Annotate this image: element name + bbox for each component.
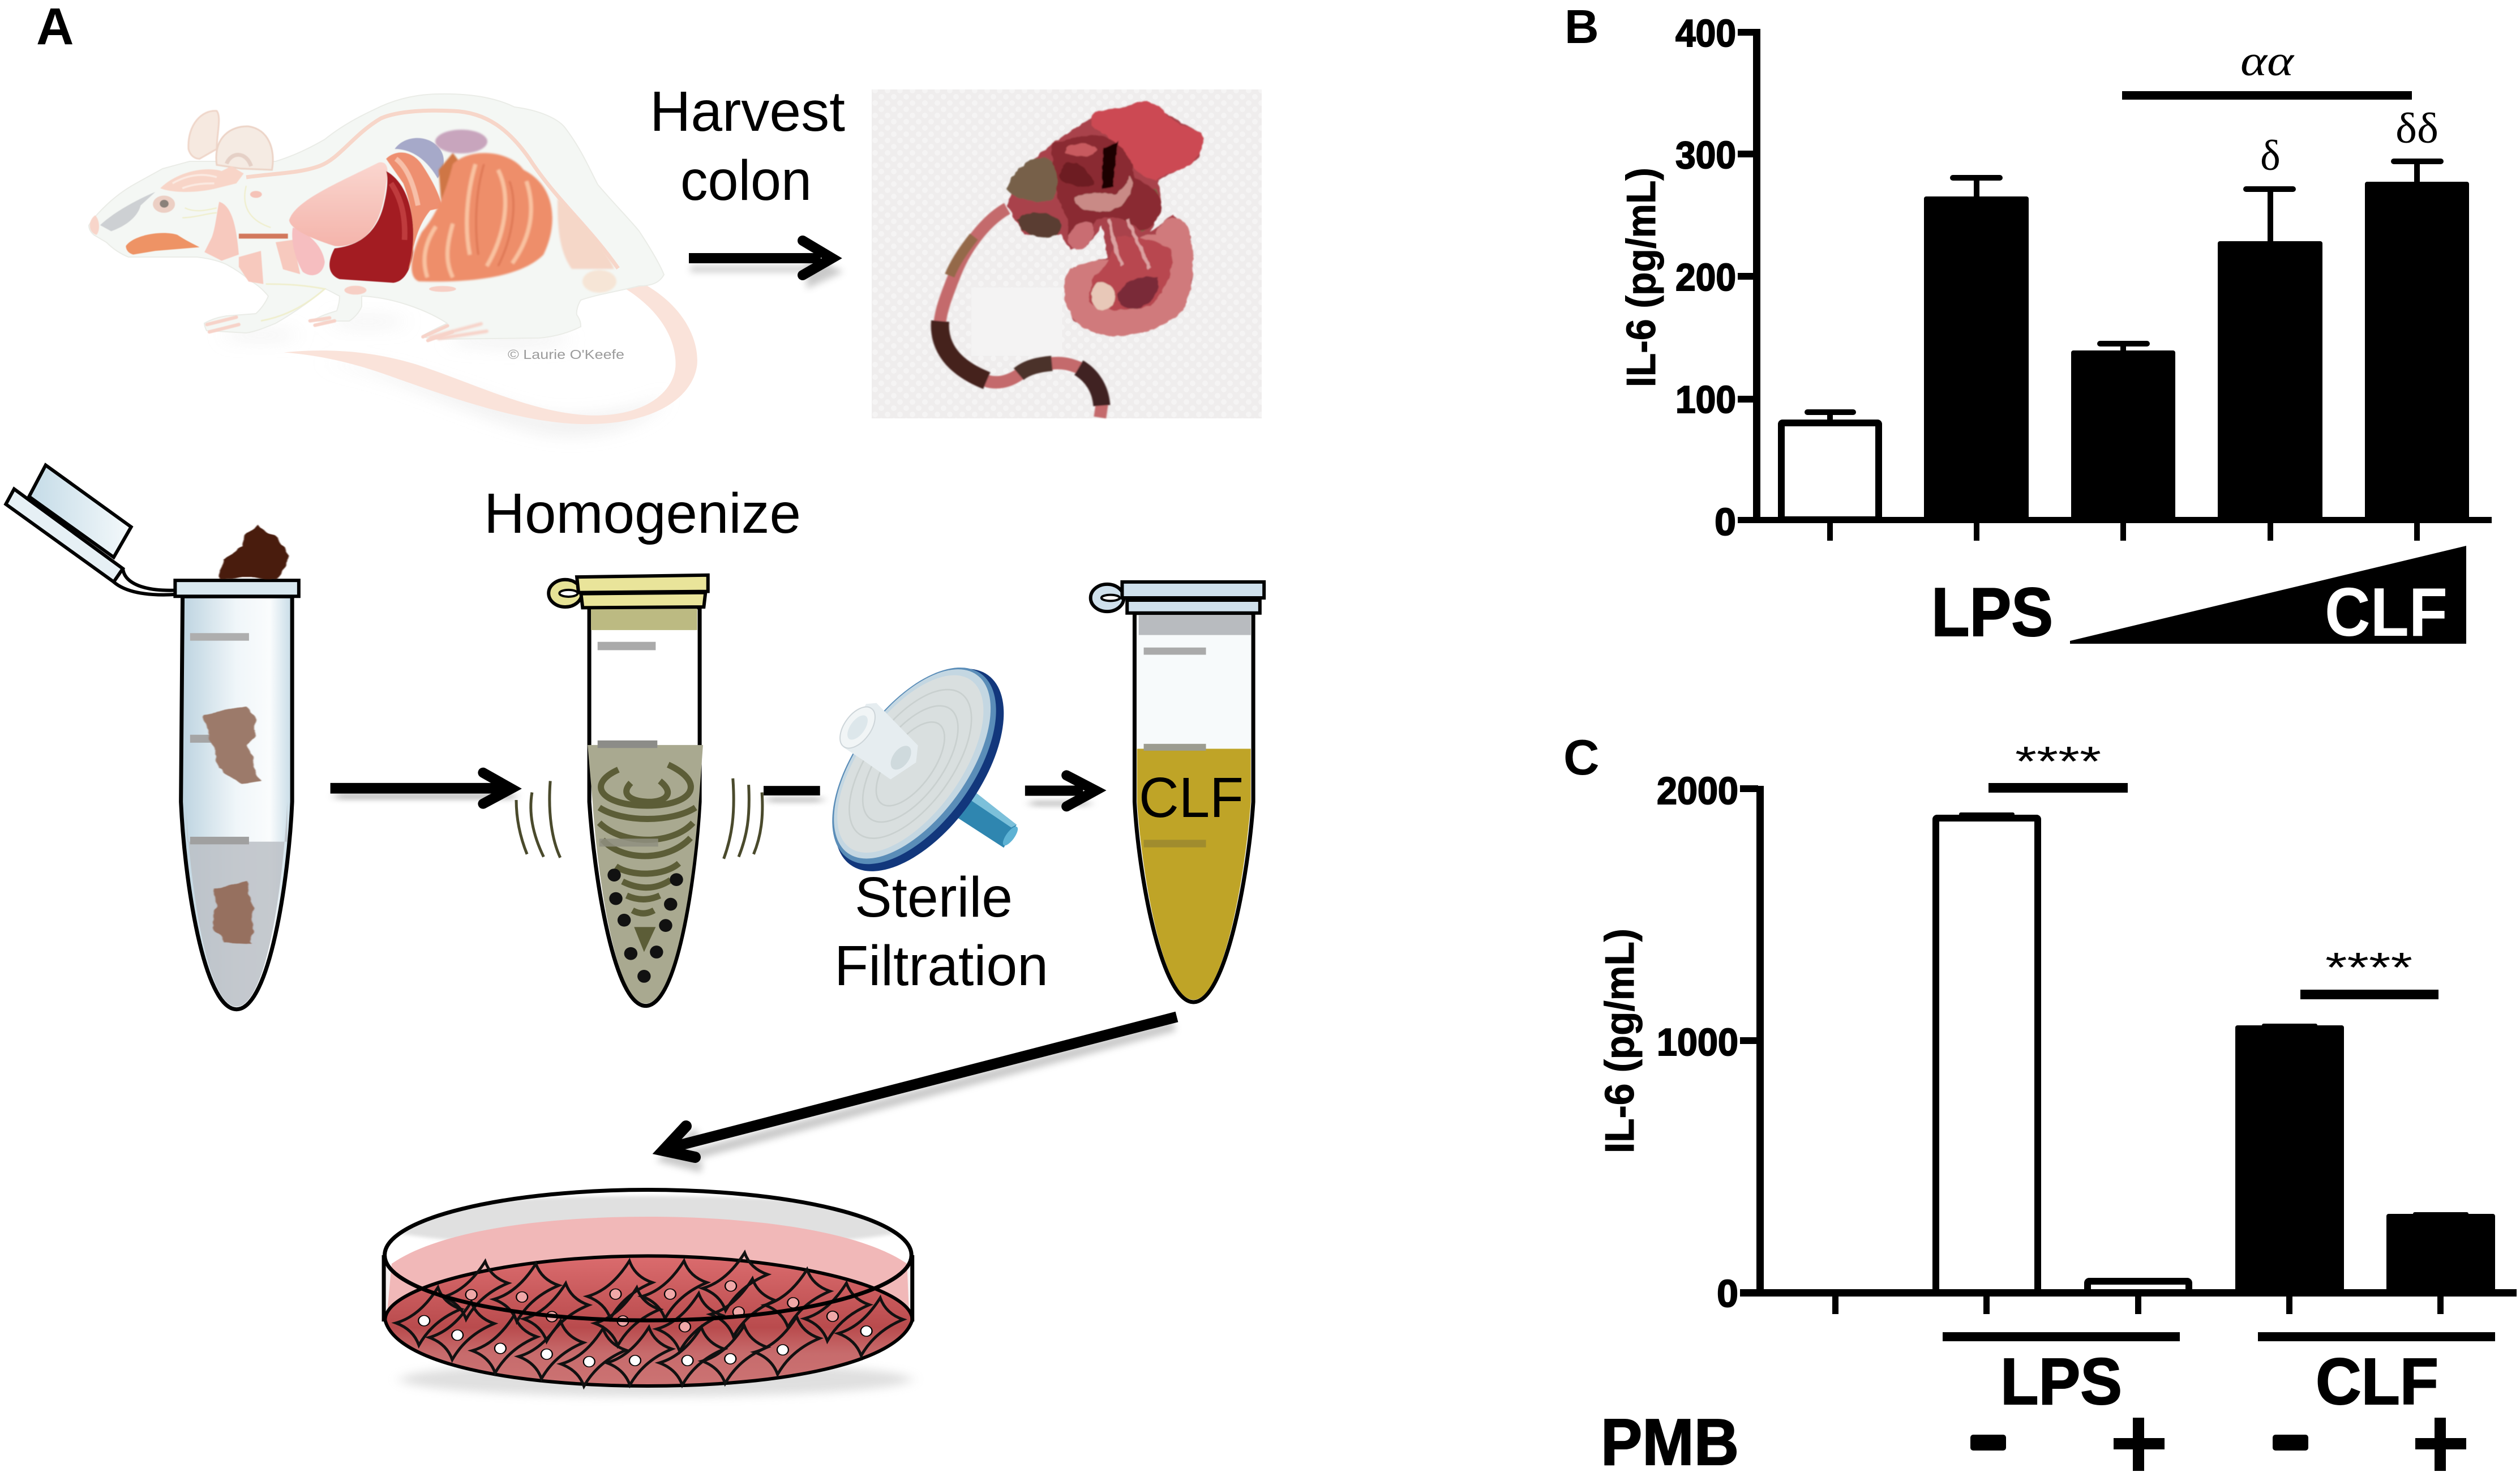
bar: low CLF: [2071, 341, 2175, 520]
vibration lines: [516, 778, 762, 859]
y axis tick labels: 0: [1715, 500, 1736, 544]
y axis tick labels: 400: [1675, 12, 1736, 55]
label: LPS: LPS: [1931, 574, 2053, 651]
illustration: rat anatomy: [89, 94, 697, 433]
significance: CLF comparison: [2300, 944, 2438, 999]
y axis title: IL-6 (pg/mL): [1597, 929, 1643, 1153]
significance: CLF comparison: ****: [2325, 944, 2412, 991]
tube: filtered CLF: [1091, 582, 1264, 1002]
label: Sterile: Sterile: [855, 866, 1013, 929]
PMB minus LPS: [1970, 1435, 2006, 1451]
tissue pieces: [206, 526, 290, 944]
panel: A, colon-derived fluid preparation workflow: [6, 0, 1264, 1397]
delta marks on high CLF: δδ: [2395, 105, 2438, 152]
arrow: homogenizer to filter (dash): [764, 786, 822, 803]
label: colon: colon: [680, 149, 812, 212]
significance bar with alpha marks: αα: [2240, 37, 2295, 85]
label: Homogenize: Homogenize: [484, 482, 801, 545]
wedge: increasing CLF: CLF: [2325, 574, 2448, 651]
tube: homogenizing sample: [548, 575, 708, 1006]
wedge: increasing CLF: [2070, 546, 2466, 651]
label: Harvest: Harvest: [650, 80, 845, 143]
rear organs: [412, 130, 616, 339]
row: PMB treatment: [1601, 1405, 2466, 1476]
PMB minus CLF: [2273, 1435, 2308, 1451]
tube: open tube with colon tissue: [6, 465, 299, 1009]
bar: control: [1781, 409, 1879, 520]
bar: CLF without PMB: [2235, 1024, 2344, 1293]
PMB plus CLF: [2415, 1418, 2466, 1471]
spine: [246, 110, 618, 268]
significance: LPS comparison: [1988, 738, 2128, 793]
bar: LPS without PMB: [1936, 812, 2038, 1293]
delta mark on mid CLF: δ: [2260, 132, 2281, 179]
axes and ticks: [1738, 29, 2492, 541]
panel: B, IL-6 bar chart with increasing CLF: [1565, 0, 2492, 651]
axes and ticks: [1740, 785, 2517, 1314]
y axis tick labels: 200: [1675, 256, 1736, 299]
arrow: tube to homogenizer: [331, 773, 515, 804]
cell nuclei: [418, 1281, 872, 1367]
bead dots: [607, 869, 683, 983]
arrow: rat to colon: [689, 241, 843, 289]
significance: LPS comparison: ****: [2015, 738, 2101, 785]
group: CLF: [2258, 1332, 2495, 1418]
label: Filtration: Filtration: [834, 934, 1048, 998]
group: CLF: CLF: [2316, 1345, 2438, 1418]
group: LPS: LPS: [2000, 1345, 2122, 1418]
y axis tick labels: [1657, 769, 1738, 1315]
PMB plus LPS: [2114, 1418, 2165, 1471]
y axis tick labels: 0: [1717, 1272, 1738, 1315]
panel label C: C: [1563, 729, 1600, 785]
bar: mid CLF: [2218, 186, 2322, 520]
group: LPS: [1943, 1332, 2180, 1418]
cells: [396, 1253, 903, 1386]
label: CLF in tube: CLF: [1139, 766, 1244, 829]
y axis tick labels: 1000: [1657, 1021, 1738, 1064]
bar: high CLF: [2365, 159, 2469, 520]
photo: harvested colon: [872, 89, 1262, 418]
arrow: CLF onto cultured cells: [663, 1017, 1177, 1167]
y axis tick labels: 2000: [1657, 769, 1738, 812]
panel: C, IL-6 bar chart with polymyxin B: [1563, 729, 2517, 1476]
image credit: © Laurie O'Keefe: [508, 347, 624, 362]
y axis tick labels: 300: [1675, 134, 1736, 177]
panel label B: B: [1565, 0, 1599, 53]
bar: LPS: [1924, 175, 2029, 520]
y axis title: IL-6 (pg/mL): [1619, 168, 1664, 387]
arrow: filter to CLF tube: [1025, 775, 1096, 807]
icon: culture dish with cells: [371, 1190, 925, 1397]
head and front organs: [90, 111, 456, 340]
significance bar with alpha marks: [2122, 37, 2412, 100]
tube lid open: [6, 465, 176, 595]
bar: CLF with PMB: [2386, 1212, 2495, 1293]
y axis tick labels: [1675, 12, 1736, 544]
vortex swirl: [599, 765, 696, 913]
bar: LPS with PMB: [2088, 1281, 2189, 1293]
icon: syringe filter: [800, 639, 1037, 900]
y axis tick labels: 100: [1675, 378, 1736, 421]
